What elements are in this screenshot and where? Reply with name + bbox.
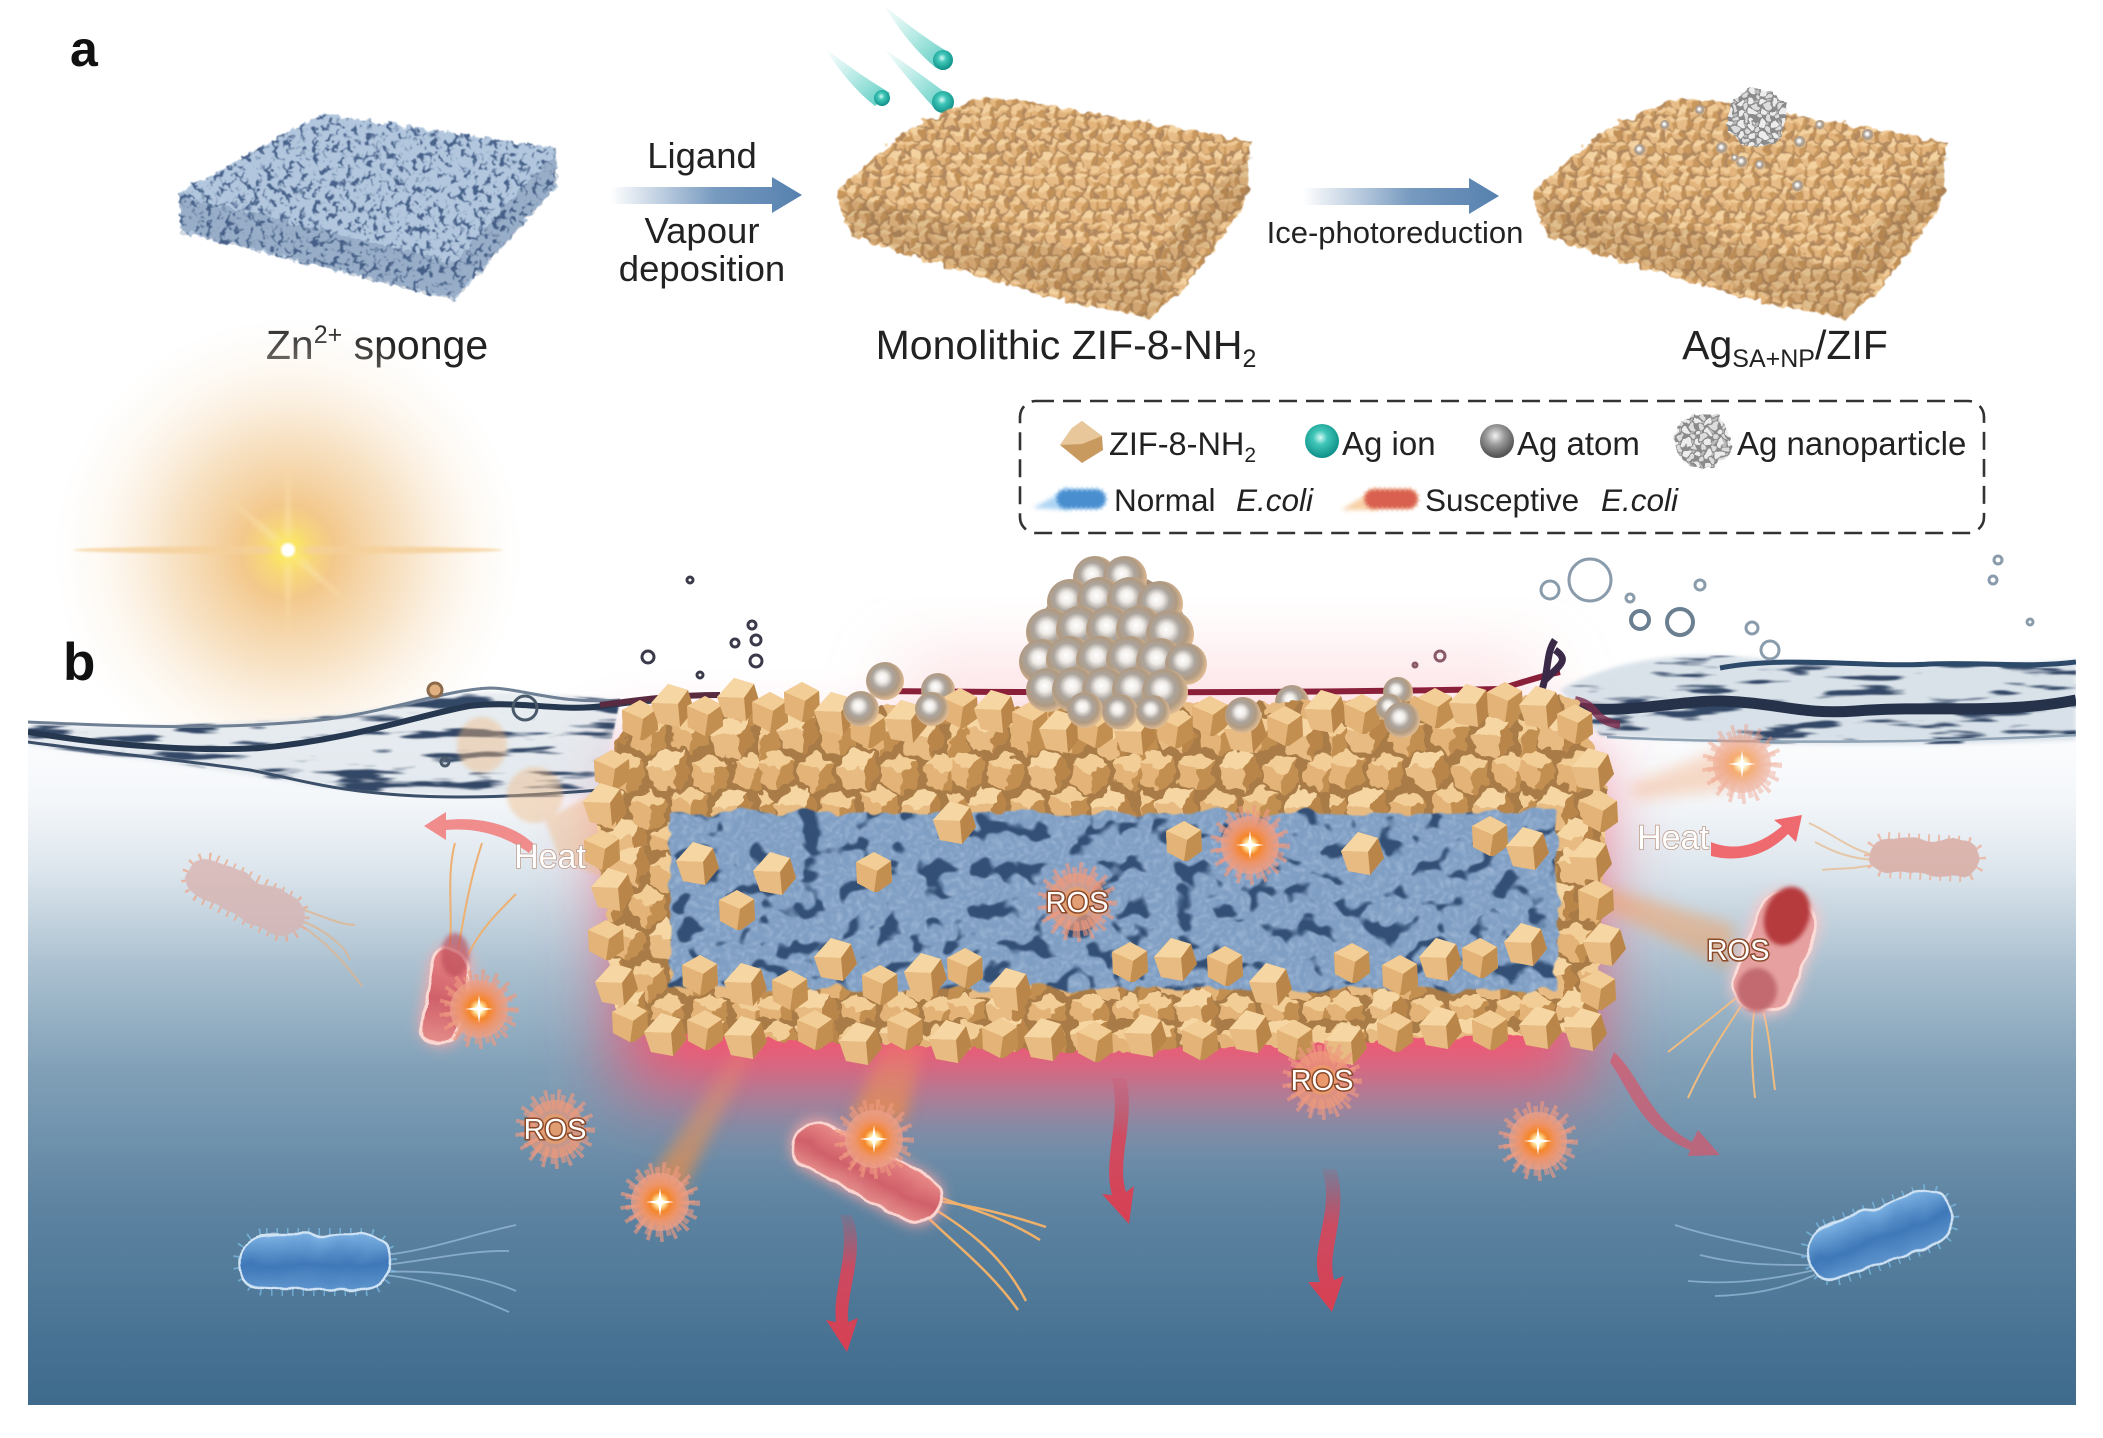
label: AgSA+NP/ZIF: /ZIF: [1815, 322, 1888, 368]
label: Vapour deposition: deposition: [619, 248, 785, 289]
sunlight patches under surface: [457, 717, 610, 880]
bacterium: red with ROS left: [417, 843, 516, 1049]
legend icon: ZIF cube: [1060, 421, 1103, 463]
water body: [28, 772, 2076, 1405]
bacterium: red bottom centre: [782, 1111, 1046, 1310]
icon: Ag ions falling: [825, 4, 954, 113]
bacterium: blue right: [1675, 1184, 1960, 1296]
ROS marker left: [524, 1099, 586, 1159]
icon: sun: [53, 317, 523, 787]
label: Vapour deposition: Vapour: [644, 210, 760, 251]
panel a: synthesis route: [179, 4, 1947, 373]
ROS star on centre bacterium: [844, 1109, 904, 1169]
ROS star inside sponge: [1220, 815, 1280, 875]
label: Ice-photoreduction: Ice-photoreduction: [1267, 215, 1523, 250]
label: Zn2+ sponge: sponge: [342, 322, 488, 368]
small Ag atoms on rim: [843, 691, 1420, 738]
bacterium: faded left: [181, 852, 362, 986]
legend text: Susceptive E.coli: E.coli: [1601, 482, 1679, 518]
rim cubes: top: [622, 678, 1593, 755]
ROS marker left: ROS: [524, 1114, 586, 1146]
label: Heat left: Heat: [514, 838, 586, 876]
ROS star lower right: [1508, 1111, 1568, 1171]
ROS marker inside sponge: [1046, 872, 1108, 932]
arrow: heat right: [1711, 815, 1802, 858]
panel label b: b: [63, 633, 95, 692]
arrow: red down 2: [1102, 1078, 1134, 1224]
arrow: red down 3: [1308, 1169, 1344, 1312]
ROS marker bottom: ROS: [1291, 1065, 1353, 1097]
ROS label on right bacterium: ROS: [1707, 935, 1769, 967]
legend icon: normal E. coli: [1033, 488, 1106, 510]
icon: monolithic ZIF-8-NH2 block: [840, 96, 1251, 318]
small Ag atoms behind rim: [866, 662, 1413, 719]
legend text: Normal E.coli: Normal: [1114, 482, 1216, 518]
ROS star upper right: [1712, 734, 1772, 794]
arrow: heat left: [424, 812, 535, 853]
arrow: ligand vapour deposition: [610, 177, 802, 213]
legend text: Susceptive E.coli: Susceptive: [1425, 482, 1579, 518]
label: Monolithic ZIF-8-NH2: Monolithic ZIF-8-NH: [876, 322, 1242, 368]
bubbles: [428, 556, 2033, 766]
label: Ligand: Ligand: [647, 135, 757, 176]
legend box: [1020, 401, 1984, 533]
legend text: Ag ion: Ag ion: [1342, 425, 1436, 462]
legend text: Ag nanoparticle: Ag nanoparticle: [1737, 425, 1966, 462]
ROS marker bottom: [1291, 1050, 1353, 1110]
Ag nanoparticle on main block: [1019, 556, 1207, 730]
legend text: ZIF-8-NH2: ZIF-8-NH: [1109, 426, 1244, 462]
bacterium: faded right: [1809, 823, 1981, 877]
rim cubes: sides and bottom: [583, 748, 1626, 1065]
label: Zn2+ sponge: 2+: [314, 321, 342, 349]
label: AgSA+NP/ZIF: Ag: [1682, 322, 1732, 368]
cubes over sponge core: [676, 801, 1549, 1011]
bacterium: red right: [1668, 880, 1828, 1098]
legend icon: susceptive E. coli: [1341, 488, 1418, 510]
label: Heat right: Heat: [1637, 819, 1709, 857]
panel b: water scene: [28, 556, 2076, 1405]
panel label a: a: [70, 21, 99, 77]
ROS marker inside sponge: ROS: [1046, 887, 1108, 919]
water surface ripples: [28, 640, 2076, 797]
legend icon: Ag nanoparticle: [1675, 413, 1731, 469]
main ZIF block: [583, 678, 1626, 1065]
porous Zn sponge core: [670, 813, 1557, 989]
legend icon: Ag atom: [1480, 424, 1514, 458]
icon: Zn2+ sponge block: [179, 114, 556, 300]
legend text: Normal E.coli: E.coli: [1236, 482, 1314, 518]
label: AgSA+NP/ZIF: SA+NP: [1732, 345, 1815, 373]
arrow: red diagonal: [1610, 1052, 1720, 1156]
icon: AgSA+NP/ZIF block: [1536, 88, 1947, 319]
bacterium: blue left: [240, 1225, 516, 1312]
arrow: red down 1: [826, 1215, 858, 1352]
label: Zn2+ sponge: Zn: [266, 322, 314, 368]
ROS star below left: [630, 1172, 690, 1232]
legend icon: Ag ion: [1305, 424, 1339, 458]
legend text: Ag atom: Ag atom: [1517, 425, 1640, 462]
label: Monolithic ZIF-8-NH2: 2: [1242, 345, 1256, 373]
ROS star on left red bacterium: [449, 979, 509, 1039]
arrow: ice-photoreduction: [1303, 178, 1499, 214]
orange ROS beams: [645, 745, 1735, 1195]
red heat glow: [620, 668, 1590, 1090]
legend text: ZIF-8-NH2: 2: [1244, 444, 1256, 467]
